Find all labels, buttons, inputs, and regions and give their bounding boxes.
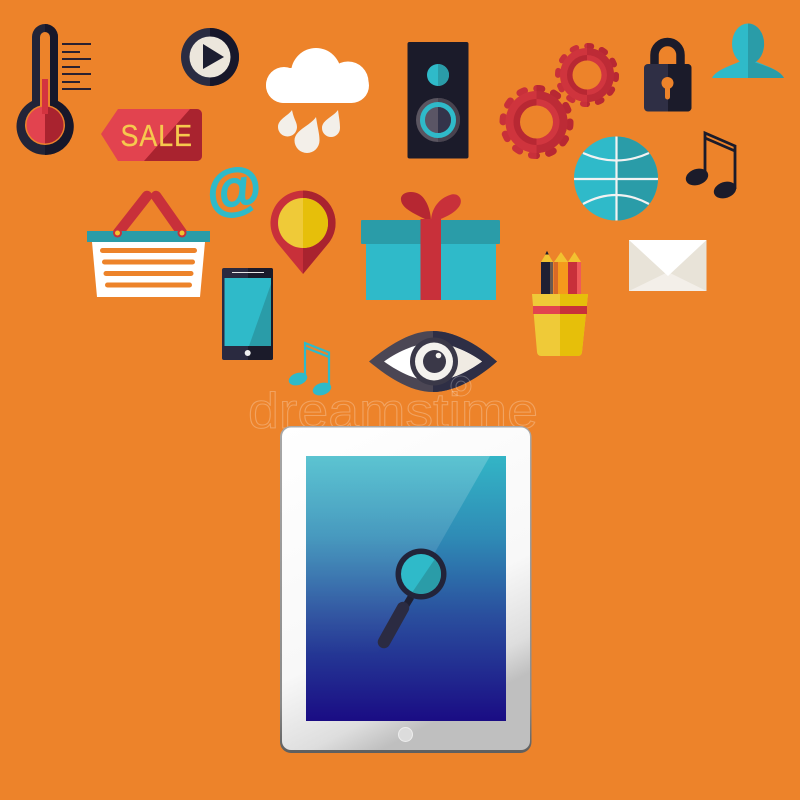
bow right lobe — [431, 194, 461, 222]
icon: magnifying glass — [384, 548, 446, 642]
icon: gears — [503, 46, 616, 156]
icon: padlock — [644, 42, 692, 112]
icon: play button — [181, 28, 239, 86]
icon: sale tag — [101, 109, 202, 161]
icon: speaker — [408, 42, 468, 158]
icon: gift box — [361, 192, 500, 300]
icon: thermometer — [17, 24, 91, 155]
icon: at sign: @ — [202, 154, 265, 224]
sale label: SALE — [120, 119, 193, 153]
home button — [398, 728, 412, 742]
icon: music note teal — [287, 343, 333, 398]
pencils — [541, 252, 581, 295]
icon: rain cloud — [266, 48, 369, 153]
small gear — [558, 46, 616, 104]
icon: eye — [369, 331, 497, 392]
icon: person — [712, 23, 784, 78]
icon: envelope — [629, 240, 706, 291]
cloud — [266, 48, 369, 103]
icon: map pin — [271, 190, 336, 274]
tablet — [280, 426, 532, 753]
icon: shopping basket — [87, 196, 210, 297]
icon: smartphone — [222, 268, 273, 360]
icon: music note dark — [684, 133, 738, 201]
icon: pencil cup — [532, 252, 588, 356]
tablet screen — [306, 456, 506, 721]
watermark: dreamstime — [248, 383, 538, 439]
bow left lobe — [401, 192, 431, 222]
rain drops — [278, 110, 340, 153]
icon: globe — [574, 136, 658, 221]
large gear — [503, 88, 570, 156]
